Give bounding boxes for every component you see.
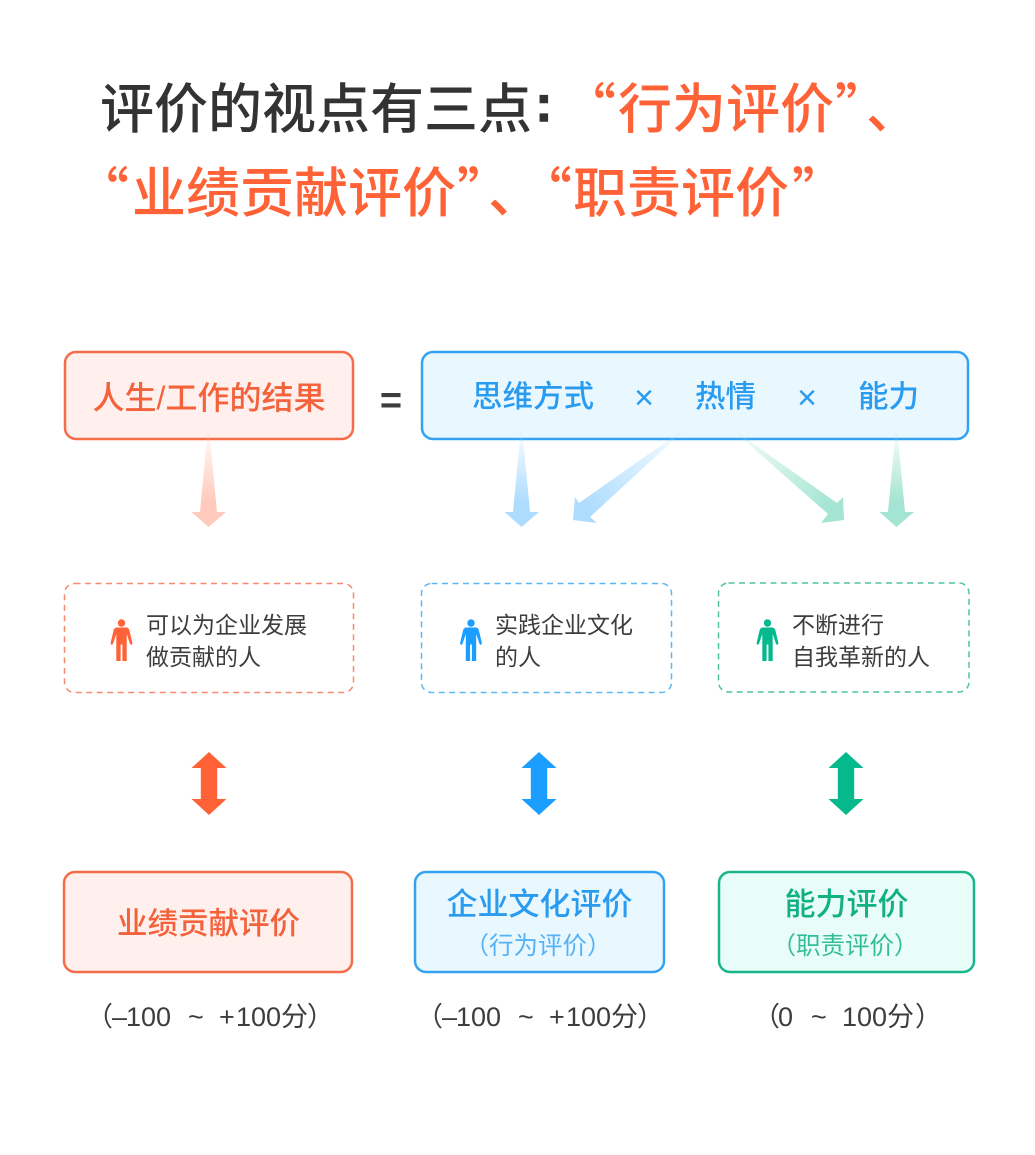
panel: practises corporate culture: 的人 (495, 644, 541, 670)
panel: practises corporate culture (422, 584, 672, 692)
panel: thinking, passion, ability formula: 能力 (858, 380, 919, 414)
title: 、 (488, 149, 542, 228)
score range: performance: – (112, 1002, 127, 1032)
panel: performance evaluation (64, 872, 352, 972)
score range: ability: 0 (778, 1002, 793, 1032)
panel: thinking, passion, ability formula: 热情 (695, 380, 756, 414)
arrow: green double (828, 752, 864, 815)
panel: thinking, passion, ability formula: × (634, 379, 654, 417)
title: 评价的视点有三点 (100, 65, 532, 144)
panel: contributes to the company (64, 584, 354, 692)
score range: culture: – (442, 1002, 457, 1032)
score range: culture: 100分 (566, 1002, 638, 1032)
panel: continual self-renewal (718, 583, 969, 692)
panel: life and work result: 人生/工作的结果 (93, 380, 325, 416)
title: “ (518, 149, 572, 228)
title: ” (792, 149, 846, 228)
icon: blue person (460, 619, 482, 661)
panel: corporate culture evaluation (415, 872, 664, 972)
arrow: thinking to culture (504, 427, 539, 527)
icon: green person (757, 619, 778, 661)
panel: life and work result (65, 352, 353, 439)
panel: ability evaluation: （职责评价） (772, 932, 918, 960)
score range: ability: ~ (811, 1002, 827, 1032)
arrow: ability to self-renewal (880, 427, 914, 527)
panel: practises corporate culture: 实践企业文化 (495, 612, 633, 638)
panel: thinking, passion, ability formula: 思维方式 (472, 380, 594, 414)
arrow: result to performance (192, 427, 226, 527)
arrow: blue double (522, 752, 556, 815)
panel: contributes to the company: 可以为企业发展 (146, 612, 307, 638)
panel: performance evaluation: 业绩贡献评价 (117, 907, 300, 941)
score range: performance: 100 (126, 1002, 171, 1032)
score range: culture: （ (416, 1002, 443, 1032)
arrow: passion to ability (727, 425, 844, 523)
title: “ (562, 65, 616, 144)
panel: continual self-renewal: 自我革新的人 (792, 644, 930, 670)
panel: ability evaluation (719, 872, 974, 972)
title: 职责评价 (573, 149, 789, 228)
arrow: passion to culture (573, 425, 690, 523)
panel: ability evaluation: 能力评价 (784, 887, 908, 922)
score range: performance: ） (307, 1002, 334, 1032)
score range: performance: （ (86, 1002, 113, 1032)
score range: performance: ~ (188, 1002, 204, 1032)
title: ” (835, 65, 889, 144)
title (75, 65, 920, 228)
title: “ (75, 149, 129, 228)
panel: contributes to the company: 做贡献的人 (146, 644, 261, 670)
panel: corporate culture evaluation: （行为评价） (464, 932, 612, 960)
score range: culture: 100 (456, 1002, 501, 1032)
title: ” (457, 149, 511, 228)
title: : (536, 76, 552, 132)
score range: performance: 100分 (236, 1002, 308, 1032)
score range: culture: ~ (518, 1002, 534, 1032)
panel: thinking, passion, ability formula: × (797, 379, 817, 417)
title: 、 (866, 65, 920, 144)
score range: ability: 100分 (842, 1002, 914, 1032)
score range: ability: （ (753, 1002, 780, 1032)
panel: continual self-renewal: 不断进行 (792, 612, 884, 638)
arrow: red double (192, 752, 226, 815)
equals sign: = (380, 380, 402, 422)
title: 行为评价 (618, 65, 834, 144)
panel: thinking, passion, ability formula (422, 352, 968, 439)
title: 业绩贡献评价 (132, 149, 456, 228)
score range: culture: + (549, 1002, 565, 1032)
score range: culture: ） (637, 1002, 664, 1032)
score range: performance: + (219, 1002, 235, 1032)
panel: corporate culture evaluation: 企业文化评价 (446, 887, 632, 922)
score range: ability: ） (915, 1002, 942, 1032)
icon: red person (111, 619, 132, 661)
